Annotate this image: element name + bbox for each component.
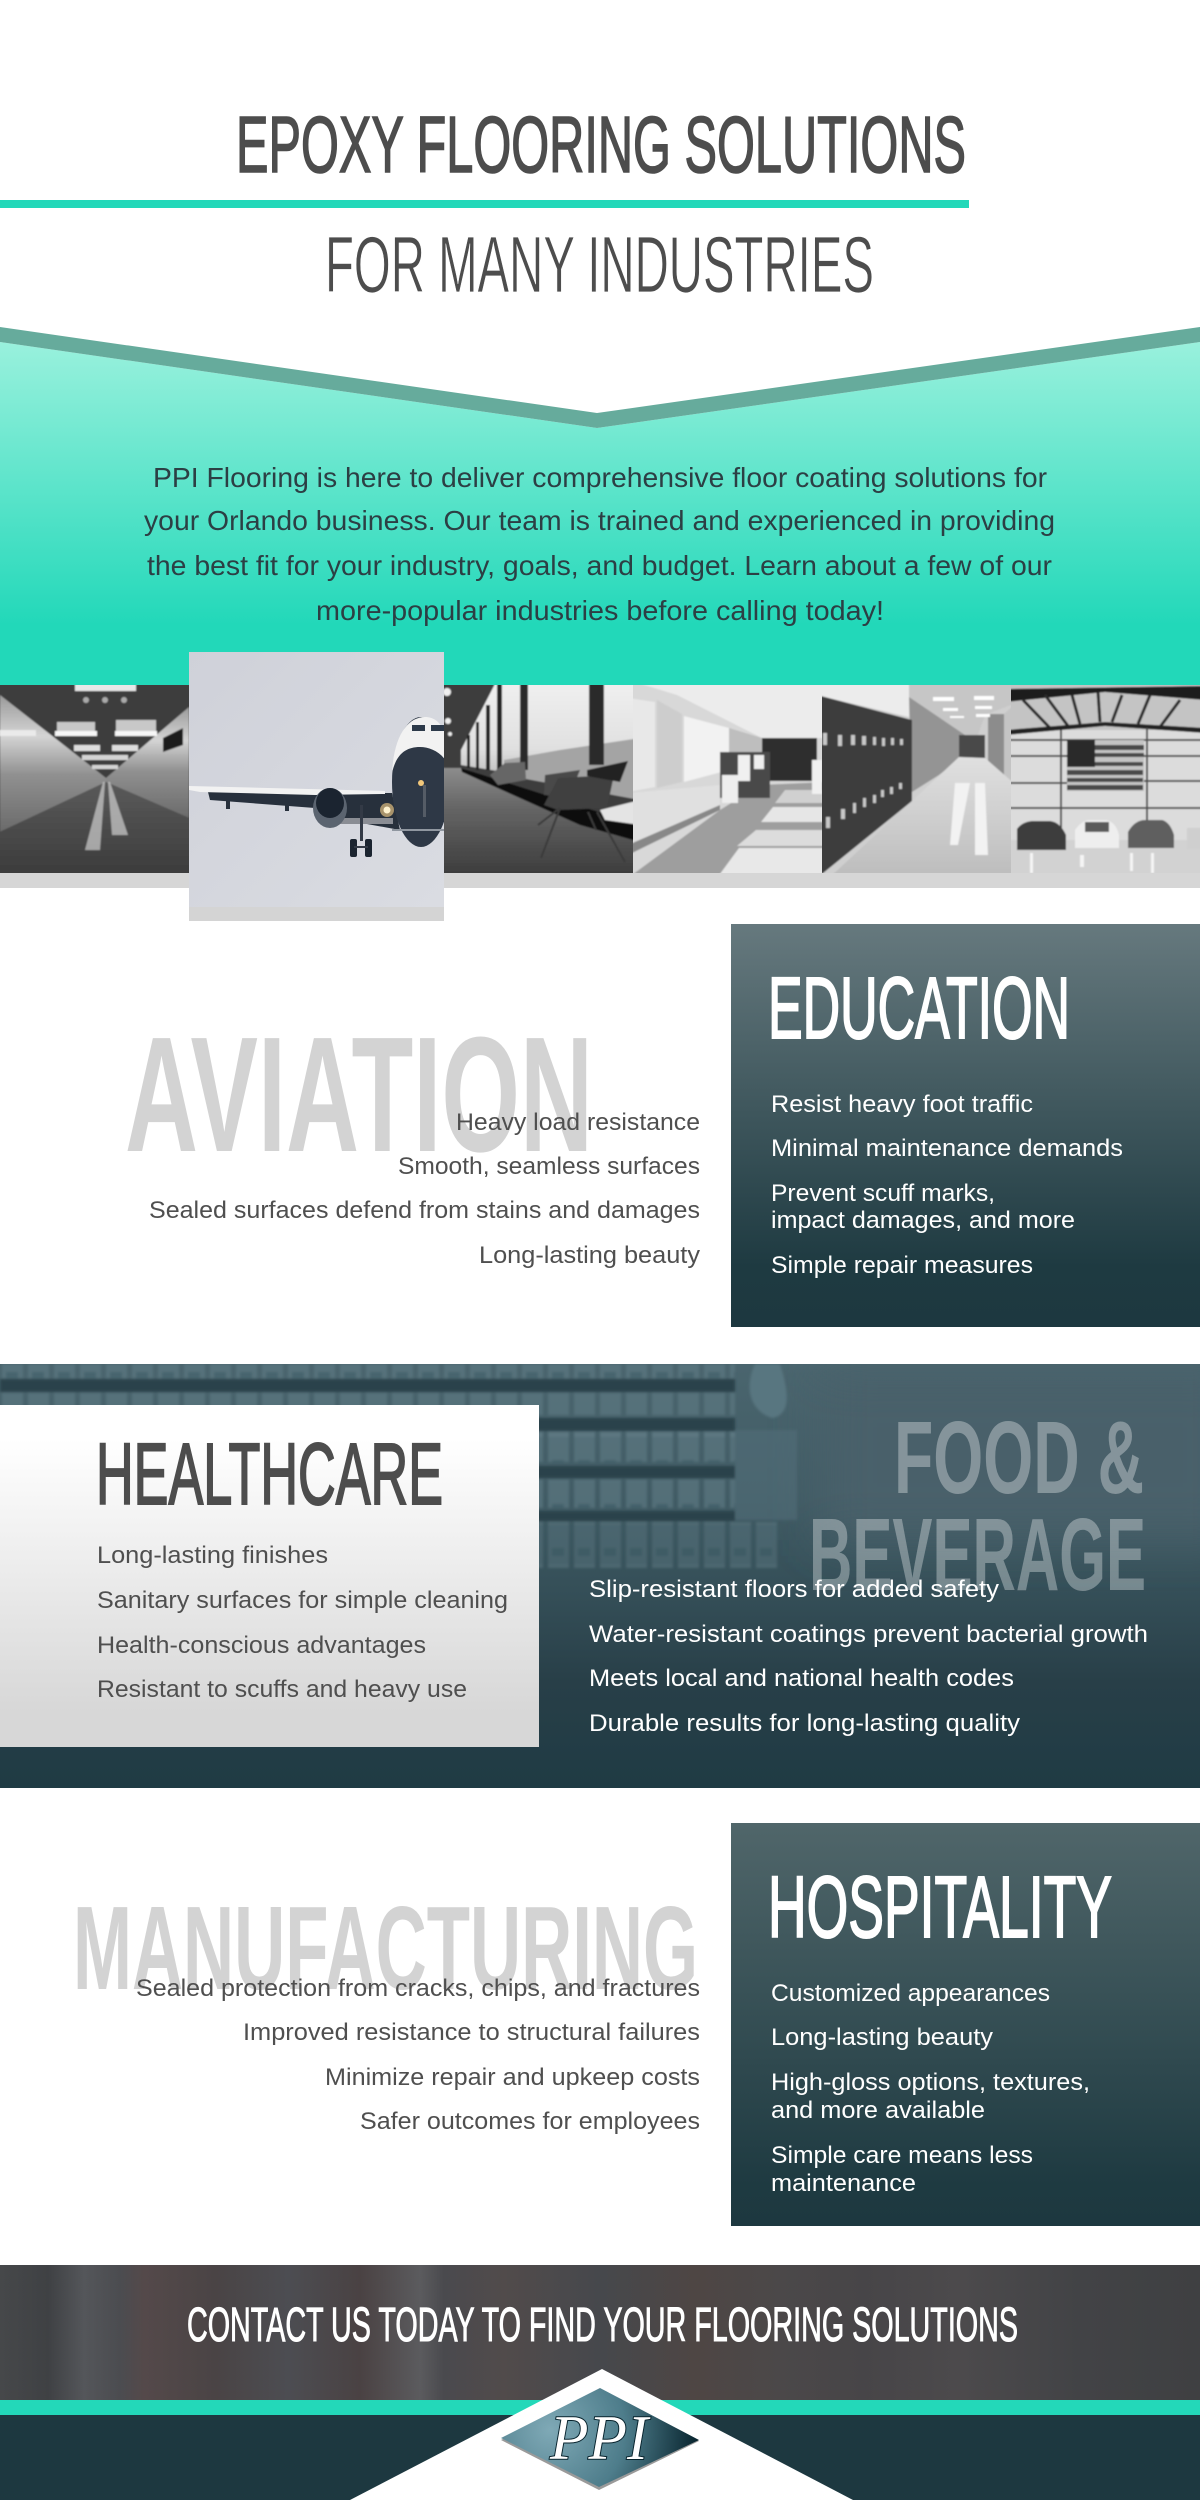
food and beverage list bbox=[589, 1576, 1148, 1737]
aviation list: Long-lasting beauty bbox=[479, 1242, 700, 1269]
hospitality background bbox=[731, 1823, 1200, 2226]
education list: Resist heavy foot traffic bbox=[771, 1091, 1033, 1118]
intro text: more-popular industries before calling today! bbox=[316, 595, 884, 626]
healthcare background bbox=[0, 1405, 539, 1747]
panel: food and beverage band bbox=[0, 1364, 1200, 1788]
education list: Minimal maintenance demands bbox=[771, 1135, 1123, 1162]
intro text: PPI Flooring is here to deliver comprehensive floor coating solutions for bbox=[153, 462, 1047, 493]
education list bbox=[771, 1091, 1123, 1279]
aviation list bbox=[149, 1109, 700, 1269]
footer bbox=[0, 2265, 1200, 2500]
aviation watermark heading: AVIATION bbox=[125, 1003, 593, 1186]
teal footer rule bbox=[0, 2400, 1200, 2415]
hospitality list: maintenance bbox=[771, 2170, 916, 2197]
food and beverage watermark heading bbox=[813, 1421, 1144, 1591]
card shadow bbox=[189, 907, 444, 921]
food and beverage list: Slip-resistant floors for added safety bbox=[589, 1576, 999, 1603]
hospitality list: Long-lasting beauty bbox=[771, 2024, 993, 2051]
food and beverage list: Meets local and national health codes bbox=[589, 1665, 1014, 1692]
photo: school lockers bbox=[817, 680, 1016, 878]
healthcare list: Health-conscious advantages bbox=[97, 1632, 426, 1659]
supermarket shelf background bbox=[0, 1364, 1200, 1788]
education list: Prevent scuff marks, bbox=[771, 1180, 995, 1207]
healthcare list bbox=[97, 1542, 508, 1703]
icon: airplane image bbox=[189, 652, 450, 907]
healthcare heading: HEALTHCARE bbox=[96, 1426, 443, 1523]
healthcare list: Long-lasting finishes bbox=[97, 1542, 328, 1569]
food and beverage list: Water-resistant coatings prevent bacterial growth bbox=[589, 1621, 1148, 1648]
header bbox=[0, 100, 969, 309]
dark footer base bbox=[0, 2415, 1200, 2500]
contact band background bbox=[0, 2265, 1200, 2400]
panel: manufacturing bbox=[73, 1882, 700, 2135]
hospitality list bbox=[771, 1980, 1090, 2197]
photo: hospital hallway bbox=[628, 680, 827, 878]
manufacturing list: Improved resistance to structural failures bbox=[243, 2019, 700, 2046]
photo strip shadow band bbox=[0, 873, 1200, 888]
intro text bbox=[144, 462, 1055, 626]
logo: PPI diamond: PPI bbox=[549, 2402, 651, 2473]
manufacturing list bbox=[136, 1975, 700, 2135]
panel: teal intro with chevron bbox=[0, 327, 1200, 685]
logo: PPI diamond bbox=[501, 2388, 699, 2490]
healthcare list: Resistant to scuffs and heavy use bbox=[97, 1676, 467, 1703]
teal chevron background bbox=[0, 342, 1200, 685]
hospitality list: and more available bbox=[771, 2097, 985, 2124]
panel: education bbox=[731, 924, 1200, 1327]
education list: impact damages, and more bbox=[771, 1207, 1075, 1234]
intro text: the best fit for your industry, goals, and budget. Learn about a few of our bbox=[147, 550, 1052, 581]
teal title rule bbox=[0, 200, 969, 208]
aviation list: Heavy load resistance bbox=[456, 1109, 700, 1136]
chevron band bbox=[0, 327, 1200, 428]
white triangle bbox=[350, 2369, 853, 2500]
manufacturing list: Safer outcomes for employees bbox=[360, 2108, 700, 2135]
hospitality list: Simple care means less bbox=[771, 2142, 1033, 2169]
hospitality list: Customized appearances bbox=[771, 1980, 1050, 2007]
photo: airplane card bbox=[189, 652, 450, 921]
hospitality list: High-gloss options, textures, bbox=[771, 2069, 1090, 2096]
panel: hospitality bbox=[731, 1823, 1200, 2226]
photo: subway corridor bbox=[0, 680, 194, 878]
manufacturing watermark heading: MANUFACTURING bbox=[73, 1882, 698, 2015]
photo: hallway with lounge chairs bbox=[444, 685, 633, 873]
manufacturing list: Sealed protection from cracks, chips, and fractures bbox=[136, 1975, 700, 2002]
panel: healthcare bbox=[0, 1405, 539, 1747]
education background bbox=[731, 924, 1200, 1327]
manufacturing list: Minimize repair and upkeep costs bbox=[325, 2064, 700, 2091]
intro text: your Orlando business. Our team is trained and experienced in providing bbox=[144, 505, 1055, 536]
healthcare list: Sanitary surfaces for simple cleaning bbox=[97, 1587, 508, 1614]
food and beverage list: Durable results for long-lasting quality bbox=[589, 1710, 1020, 1737]
education list: Simple repair measures bbox=[771, 1252, 1033, 1279]
aviation list: Smooth, seamless surfaces bbox=[398, 1153, 700, 1180]
photo: hangar with flag and cars bbox=[1006, 680, 1200, 878]
aviation list: Sealed surfaces defend from stains and damages bbox=[149, 1197, 700, 1224]
panel: aviation bbox=[125, 1003, 700, 1269]
